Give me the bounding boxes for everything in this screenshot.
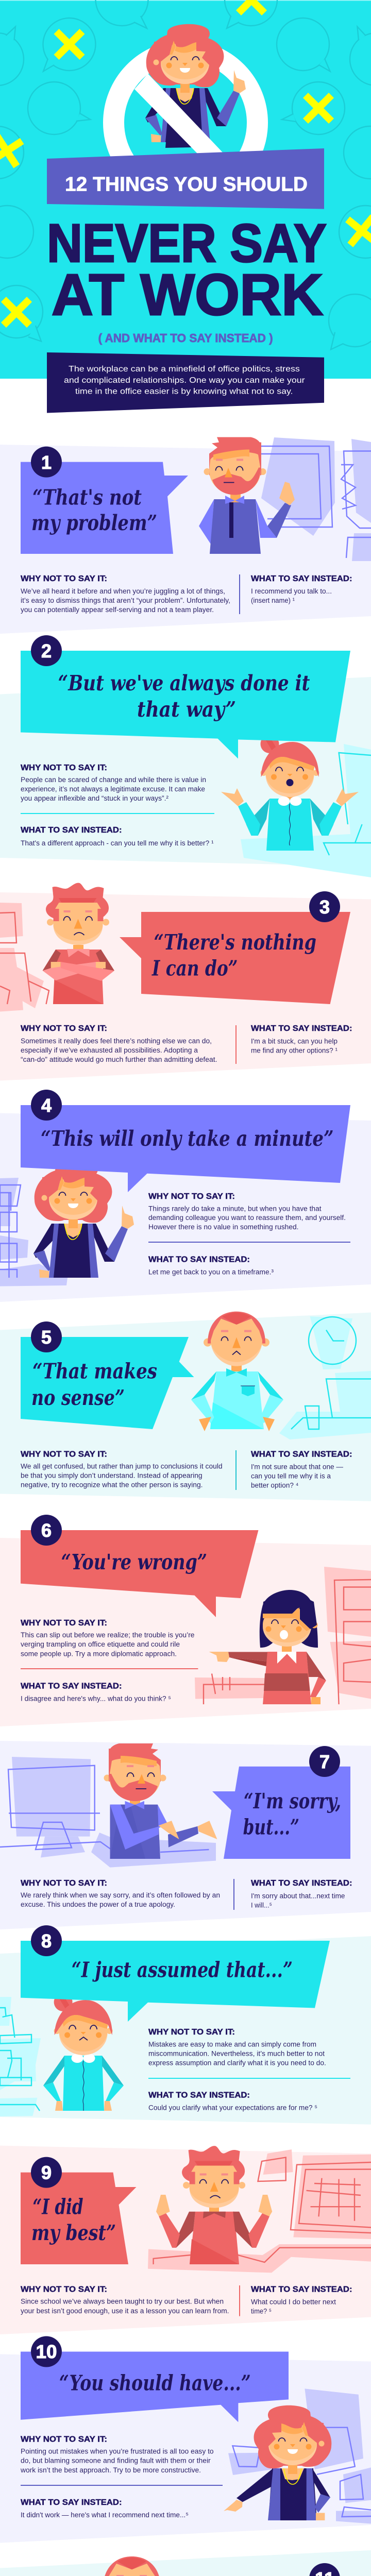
- why not to say it: it’s easy to dismiss things that aren’t “your problem”. Unfortunately,: [21, 597, 230, 604]
- what to say instead: me find any other options? ¹: [251, 1047, 338, 1054]
- speech bubble: but...”: [243, 1815, 299, 1840]
- what to say instead: That's a different approach - can you tell me why it is better? ¹: [21, 839, 214, 847]
- what to say instead: I will...⁵: [251, 1901, 272, 1909]
- why not to say it: you appear inflexible and “stuck in your ways”.²: [21, 794, 169, 802]
- why not to say it: experience, it’s not always a legitimate excuse. It can make: [21, 785, 205, 793]
- why not to say it: express assumption and clarify what it is you need to do.: [148, 2059, 326, 2066]
- banner: [47, 148, 324, 209]
- woman character: [33, 1160, 134, 1278]
- panel: item 5: [0, 1312, 371, 1501]
- speech bubble: [21, 1941, 330, 2022]
- panel: item 3: [0, 883, 371, 1081]
- panel background: [0, 2354, 371, 2543]
- prohibition slash: [134, 74, 225, 155]
- what to say instead: WHAT TO SAY INSTEAD:: [251, 1879, 352, 1888]
- speech bubble: [21, 651, 350, 758]
- why not to say it: [21, 574, 230, 614]
- speech bubble: I can do”: [151, 956, 238, 981]
- speech bubble: “That makes: [32, 1359, 157, 1384]
- man character: [191, 1312, 283, 1431]
- why not to say it: WHY NOT TO SAY IT:: [21, 764, 107, 772]
- number badge: 3: [319, 896, 330, 918]
- what to say instead: [251, 2285, 352, 2315]
- panel: item 8: [0, 1925, 371, 2125]
- man thinking: [88, 2556, 165, 2576]
- what to say instead: [251, 574, 352, 604]
- speech bubble: “I did: [32, 2195, 83, 2219]
- why not to say it: miscommunication. Nevertheless, it’s much better to not: [148, 2049, 325, 2058]
- intro box: time in the office easier is by knowing what not to say.: [75, 387, 293, 396]
- what to say instead: [148, 2091, 317, 2112]
- why not to say it: WHY NOT TO SAY IT:: [148, 2028, 235, 2037]
- why not to say it: [21, 1024, 217, 1063]
- panel: item 9: [0, 2146, 371, 2334]
- what to say instead: I'm not sure about that one —: [251, 1463, 343, 1471]
- title never say: NEVER SAY: [47, 213, 327, 274]
- why not to say it: your best isn’t good enough, use it as a lesson you can learn from.: [21, 2307, 229, 2315]
- number badge: [31, 1925, 62, 1956]
- why not to say it: excuse. This undoes the power of a true apology.: [21, 1901, 175, 1908]
- why not to say it: some people up. Try a more diplomatic approach.: [21, 1650, 177, 1658]
- what to say instead: WHAT TO SAY INSTEAD:: [148, 1255, 250, 1264]
- what to say instead: WHAT TO SAY INSTEAD:: [251, 2285, 352, 2294]
- panel: item 4: [0, 1090, 371, 1302]
- what to say instead: time? ⁵: [251, 2308, 272, 2315]
- number badge: 8: [41, 1930, 52, 1952]
- subtitle: ( AND WHAT TO SAY INSTEAD ): [98, 331, 273, 345]
- number badge: [31, 1090, 62, 1121]
- what to say instead: [251, 1450, 352, 1489]
- why not to say it: [20, 2435, 214, 2474]
- panel background: [0, 1936, 371, 2125]
- intro box: and complicated relationships. One way you can make your: [64, 376, 305, 385]
- why not to say it: do, but blaming someone and finding fault with them or their: [21, 2457, 211, 2465]
- panel background: [0, 1538, 371, 1726]
- number badge: 6: [41, 1520, 52, 1541]
- what to say instead: WHAT TO SAY INSTEAD:: [148, 2091, 250, 2100]
- speech bubble: that way”: [137, 697, 236, 722]
- speech bubble pattern: [0, 0, 371, 349]
- woman with hands on hips: [43, 1993, 124, 2111]
- man character: [199, 437, 295, 554]
- why not to say it: We all get confused, but rather than jump to conclusions it could: [21, 1462, 223, 1470]
- why not to say it: work isn’t the best approach. Try to be more constructive.: [20, 2466, 201, 2474]
- office background art: [279, 1316, 371, 1439]
- number badge: 2: [41, 640, 52, 662]
- why not to say it: be that you simply don’t understand. Instead of appearing: [21, 1471, 203, 1480]
- what to say instead: Could you clarify what your expectations are for me? ⁵: [148, 2104, 317, 2112]
- hero cyan background: [0, 0, 371, 379]
- speech bubble: no sense”: [31, 1385, 125, 1410]
- panel background: [0, 892, 371, 1081]
- number badge: [31, 2336, 62, 2367]
- panel background: [0, 677, 371, 867]
- speech bubble: “I just assumed that...”: [72, 1957, 293, 1982]
- number badge: [309, 891, 340, 922]
- speech bubble: [21, 462, 188, 554]
- what to say instead: (insert name) ¹: [251, 597, 295, 604]
- why not to say it: [21, 1619, 195, 1658]
- speech bubble: “That's not: [32, 485, 142, 510]
- number badge: [31, 447, 62, 478]
- number badge: [31, 2157, 62, 2188]
- what to say instead: WHAT TO SAY INSTEAD:: [251, 1024, 352, 1033]
- what to say instead: I disagree and here's why... what do you think? ⁵: [21, 1694, 171, 1702]
- intro box: [47, 352, 324, 413]
- panel: item 6: [0, 1515, 371, 1726]
- why not to say it: Since school we’ve always been taught to try our best. But when: [21, 2298, 224, 2305]
- speech bubble: “But we've always done it: [58, 671, 310, 696]
- what to say instead: can you tell me why it is a: [251, 1472, 331, 1480]
- office background art: [0, 1178, 68, 1286]
- why not to say it: [148, 1192, 346, 1231]
- why not to say it: Mistakes are easy to make and can simply come from: [148, 2040, 316, 2048]
- speech bubble: [21, 2173, 136, 2264]
- panel background: [0, 1741, 371, 1929]
- why not to say it: WHY NOT TO SAY IT:: [21, 1450, 107, 1459]
- number badge: 1: [41, 452, 52, 473]
- what to say instead: WHAT TO SAY INSTEAD:: [21, 1682, 122, 1691]
- why not to say it: you can potentially appear self-serving and not a team player.: [21, 606, 214, 614]
- woman character: [145, 24, 246, 148]
- why not to say it: WHY NOT TO SAY IT:: [21, 1879, 107, 1888]
- what to say instead: I'm sorry about that...next time: [251, 1892, 345, 1900]
- what to say instead: [21, 2498, 189, 2519]
- what to say instead: Let me get back to you on a timeframe.³: [148, 1268, 274, 1276]
- why not to say it: Pointing out mistakes when you’re frustrated is all too easy to: [21, 2448, 214, 2455]
- what to say instead: [148, 1255, 274, 1276]
- office background art: [228, 2388, 371, 2523]
- why not to say it: [21, 2285, 229, 2315]
- speech bubble: “I'm sorry,: [244, 1789, 341, 1814]
- why not to say it: especially if we’ve exhausted all possibilities. Adopting a: [21, 1046, 198, 1054]
- why not to say it: WHY NOT TO SAY IT:: [21, 2435, 107, 2444]
- panel background: [0, 2550, 371, 2576]
- man with crossed arms: [43, 883, 114, 1004]
- woman pointing down: [224, 2405, 331, 2520]
- office background art: [0, 1997, 41, 2116]
- why not to say it: People can be scared of change and while there is value in: [21, 776, 206, 784]
- speech bubble: “There's nothing: [154, 930, 316, 955]
- why not to say it: “can-do” attitude would go much further than admitting defeat.: [21, 1056, 217, 1063]
- why not to say it: Sometimes it really does feel there’s nothing else we can do,: [21, 1037, 212, 1045]
- what to say instead: [21, 1682, 171, 1702]
- woman character: [221, 735, 359, 851]
- what to say instead: [251, 1879, 352, 1909]
- what to say instead: better option? ⁴: [251, 1482, 299, 1489]
- what to say instead: WHAT TO SAY INSTEAD:: [251, 574, 352, 583]
- number badge: [31, 635, 62, 666]
- what to say instead: WHAT TO SAY INSTEAD:: [21, 826, 122, 835]
- office background art: [148, 2149, 371, 2273]
- why not to say it: WHY NOT TO SAY IT:: [148, 1192, 235, 1201]
- why not to say it: This can slip out before we realize; the trouble is you’re: [21, 1631, 195, 1639]
- speech bubble: [21, 1105, 350, 1192]
- number badge: [309, 2563, 340, 2576]
- what to say instead: [251, 1024, 352, 1054]
- speech bubble: “You're wrong”: [61, 1550, 207, 1574]
- panel background: [0, 2146, 371, 2334]
- number badge: 10: [36, 2341, 57, 2362]
- what to say instead: WHAT TO SAY INSTEAD:: [251, 1450, 352, 1459]
- panel background: [0, 1113, 371, 1302]
- speech bubble: [21, 2351, 289, 2422]
- why not to say it: demanding colleague you want to reassure them, and yourself.: [148, 1214, 346, 1222]
- why not to say it: [148, 2028, 326, 2066]
- speech bubble: my problem”: [31, 511, 157, 535]
- why not to say it: [21, 1879, 220, 1908]
- why not to say it: WHY NOT TO SAY IT:: [21, 574, 107, 583]
- what to say instead: WHAT TO SAY INSTEAD:: [21, 2498, 122, 2507]
- prohibition ring: [113, 50, 258, 195]
- panel: item 11: [0, 2550, 371, 2576]
- title at work: AT WORK: [52, 262, 323, 327]
- office background art: [261, 437, 371, 561]
- panel background: [0, 1313, 371, 1501]
- speech bubble: [21, 1530, 259, 1617]
- number badge: 5: [41, 1327, 52, 1348]
- speech bubble: “You should have...”: [59, 2370, 251, 2395]
- speech bubble: [21, 1337, 194, 1429]
- woman pointing: [209, 1590, 326, 1704]
- what to say instead: I recommend you talk to...: [251, 587, 332, 595]
- why not to say it: We rarely think when we say sorry, and it’s often followed by an: [21, 1891, 220, 1899]
- panel: item 10: [0, 2336, 371, 2543]
- office background art: [0, 903, 49, 1012]
- number badge: 7: [319, 1751, 330, 1772]
- panel: item 7: [0, 1741, 371, 1929]
- number badge: [31, 1321, 62, 1352]
- man character: [104, 1743, 217, 1859]
- panel background: [0, 445, 371, 634]
- why not to say it: However there is no value in something rushed.: [148, 1223, 299, 1231]
- why not to say it: We’ve all heard it before and when you’re juggling a lot of things,: [21, 587, 225, 595]
- why not to say it: WHY NOT TO SAY IT:: [21, 1619, 107, 1628]
- number badge: [309, 1746, 340, 1777]
- man raising hands: [156, 2146, 272, 2264]
- why not to say it: Things rarely do take a minute, but when you have that: [148, 1205, 322, 1212]
- number badge: 4: [41, 1095, 52, 1116]
- why not to say it: [21, 764, 206, 802]
- banner: 12 THINGS YOU SHOULD: [65, 173, 308, 196]
- what to say instead: [21, 826, 214, 847]
- speech bubble: [212, 1767, 350, 1859]
- number badge: [31, 1515, 62, 1546]
- why not to say it: WHY NOT TO SAY IT:: [21, 2285, 107, 2294]
- office background art: [0, 1757, 216, 1868]
- office background art: [195, 1567, 371, 1704]
- why not to say it: negative, try to recognize what the other person is saying.: [21, 1481, 203, 1489]
- panel: item 2: [0, 635, 371, 877]
- office background art: [241, 744, 371, 877]
- what to say instead: What could I do better next: [251, 2298, 336, 2306]
- yellow crosses: [0, 0, 371, 328]
- speech bubble: my best”: [31, 2221, 116, 2245]
- why not to say it: [21, 1450, 223, 1489]
- hero section: [0, 0, 371, 413]
- panel: item 1: [0, 437, 371, 634]
- speech bubble: [120, 912, 350, 1004]
- number badge: 9: [41, 2162, 52, 2183]
- what to say instead: I'm a bit stuck, can you help: [251, 1038, 338, 1045]
- why not to say it: WHY NOT TO SAY IT:: [21, 1024, 107, 1033]
- why not to say it: verging trampling on office etiquette and could rile: [21, 1640, 180, 1648]
- intro box: The workplace can be a minefield of office politics, stress: [69, 365, 300, 374]
- what to say instead: It didn't work — here's what I recommend next time...⁵: [21, 2511, 189, 2519]
